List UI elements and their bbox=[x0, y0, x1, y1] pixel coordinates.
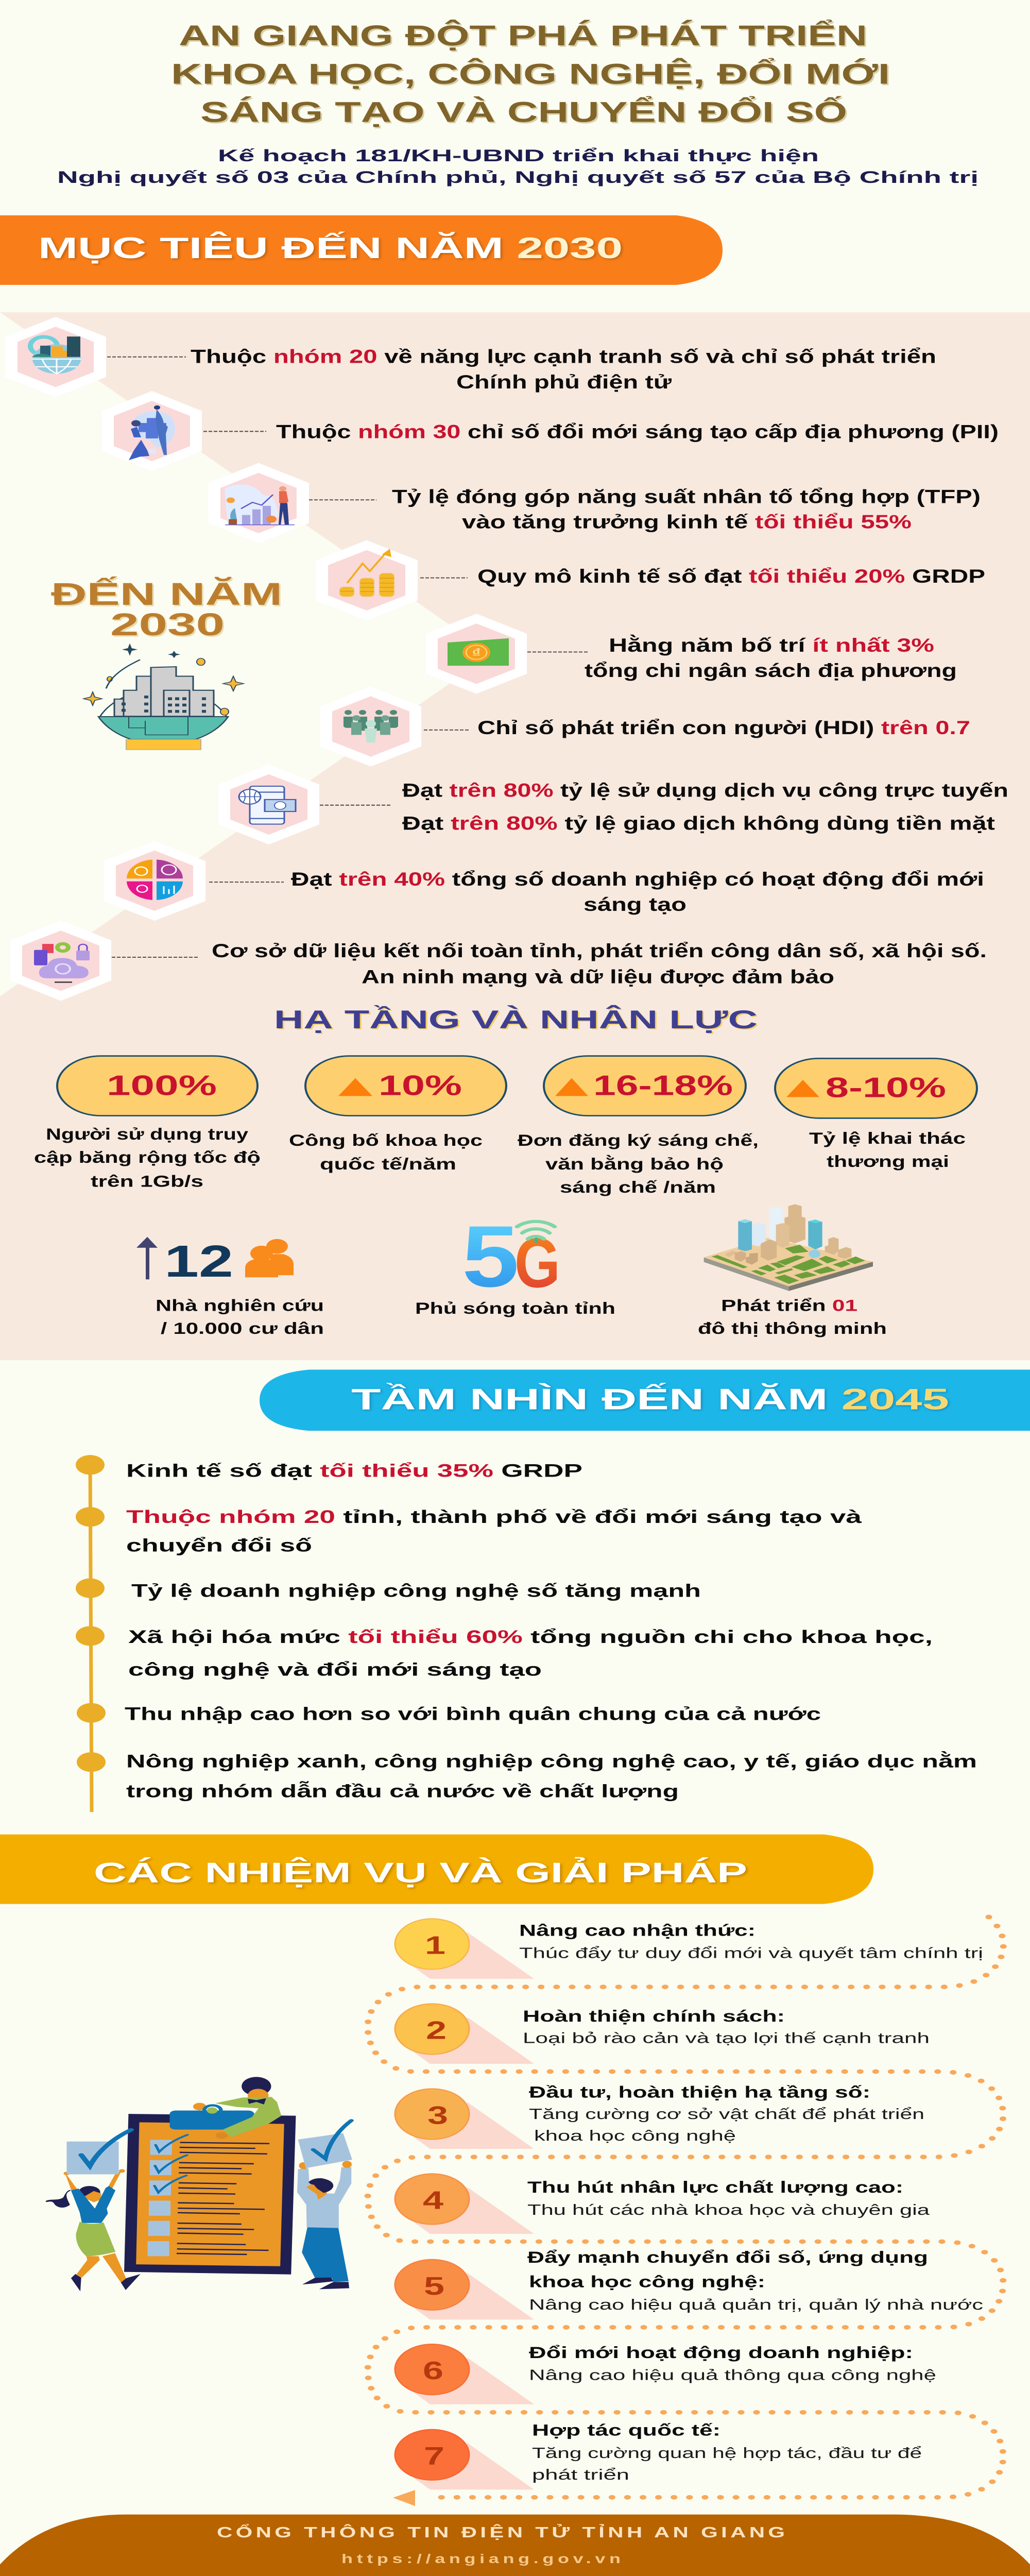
heading: by 2030: 2030 bbox=[110, 607, 225, 642]
goal 4 bbox=[316, 540, 985, 620]
stat: 8-10%: 8-10% bbox=[826, 1072, 946, 1103]
checklist rows bbox=[147, 2140, 172, 2256]
goal 7 bbox=[218, 765, 1008, 844]
text: goal 6: Chỉ số phát triển con người (HDI) trên 0.7 bbox=[477, 717, 970, 738]
number: 12 bbox=[164, 1236, 233, 1286]
text: goal 9: An ninh mạng và dữ liệu được đảm bảo bbox=[362, 966, 834, 987]
footer: https://angiang.gov.vn bbox=[341, 2551, 621, 2566]
icon: 5G: G bbox=[514, 1224, 560, 1302]
text: goal 4: Quy mô kinh tế số đạt tối thiểu 20% GRDP bbox=[477, 566, 985, 587]
text: goal 5: tổng chi ngân sách địa phương bbox=[585, 659, 957, 681]
banner: goals to 2030: MỤC TIÊU ĐẾN NĂM 2030 bbox=[38, 231, 623, 265]
connector bbox=[424, 729, 470, 731]
connector bbox=[112, 957, 198, 958]
stat: 8-10%: thương mại bbox=[827, 1153, 949, 1171]
step 6 bbox=[395, 2344, 936, 2404]
goal 9 bbox=[10, 920, 987, 1001]
text: Thu hút các nhà khoa học và chuyên gia bbox=[527, 2201, 930, 2218]
stat: 100%: cập băng rộng tốc độ bbox=[34, 1148, 261, 1166]
goal 1 bbox=[5, 317, 936, 397]
item 4: công nghệ và đổi mới sáng tạo bbox=[128, 1659, 542, 1680]
goal 6 bbox=[320, 686, 970, 767]
item 2 bbox=[126, 1507, 862, 1556]
icon: number 4 bbox=[395, 2174, 534, 2234]
item 2: chuyển đổi số bbox=[126, 1536, 312, 1556]
text: Nâng cao hiệu quả thông qua công nghệ bbox=[529, 2366, 936, 2383]
text: Nâng cao nhận thức: bbox=[519, 1922, 756, 1940]
goal 2 bbox=[102, 391, 999, 471]
sign: right check bbox=[298, 2121, 352, 2168]
icon: number 3 bbox=[395, 2089, 534, 2149]
stat: 10%: quốc tế/năm bbox=[320, 1155, 456, 1173]
banner: tasks and solutions bbox=[0, 1835, 873, 1904]
item 4: Xã hội hóa mức tối thiểu 60% tổng nguồn chi cho khoa học, bbox=[128, 1627, 933, 1647]
icon: team puzzle bbox=[102, 391, 202, 471]
text: Phủ sóng toàn tỉnh bbox=[415, 1299, 615, 1317]
icon: globe and city bbox=[5, 317, 106, 397]
vision list bbox=[125, 1461, 977, 1801]
icon: number 6 bbox=[395, 2344, 534, 2404]
icon: innovation quadrants bbox=[104, 841, 205, 921]
banner: tasks and solutions: CÁC NHIỆM VỤ VÀ GIẢI PHÁP bbox=[94, 1857, 747, 1888]
text: goal 8: sáng tạo bbox=[583, 894, 686, 915]
arrow head bbox=[393, 2490, 415, 2506]
icon: number 1 bbox=[395, 1919, 534, 1979]
stat: 100%: 100% bbox=[107, 1070, 217, 1101]
icon: banknote: ₫ bbox=[472, 647, 481, 660]
text: Thu hút nhân lực chất lượng cao: bbox=[527, 2178, 903, 2196]
text: Đổi mới hoạt động doanh nghiệp: bbox=[529, 2344, 913, 2362]
stat: 10% bbox=[289, 1056, 506, 1173]
icon: phone payment bbox=[218, 765, 319, 844]
item 1: Kinh tế số đạt tối thiểu 35% GRDP bbox=[126, 1461, 582, 1481]
illustration: checklist team bbox=[46, 2077, 352, 2291]
stat: 16-18%: văn bằng bảo hộ bbox=[545, 1155, 724, 1173]
stat: 16-18%: sáng chế /năm bbox=[560, 1178, 716, 1196]
icon: banknote bbox=[426, 614, 527, 694]
stat: 16-18%: Đơn đăng ký sáng chế, bbox=[518, 1131, 759, 1149]
text: goal 7: Đạt trên 80% tỷ lệ giao dịch không dùng tiền mặt bbox=[402, 812, 995, 834]
title: SÁNG TẠO VÀ CHUYỂN ĐỔI SỐ bbox=[200, 96, 847, 128]
item 5: Thu nhập cao hơn so với bình quân chung của cả nước bbox=[125, 1704, 821, 1724]
icon: number 6: 6 bbox=[423, 2357, 443, 2385]
heading: infrastructure and human resources: HẠ TẦNG VÀ NHÂN LỰC bbox=[274, 1005, 758, 1034]
text: Hoàn thiện chính sách: bbox=[523, 2007, 785, 2025]
text bbox=[532, 2421, 922, 2483]
text bbox=[698, 1297, 887, 1337]
item 3: Tỷ lệ doanh nghiệp công nghệ số tăng mạnh bbox=[131, 1581, 701, 1601]
connector bbox=[107, 356, 186, 358]
stat: 16-18% bbox=[518, 1056, 759, 1196]
text: goal 7 bbox=[402, 779, 1008, 834]
sign: left check bbox=[66, 2130, 131, 2174]
stat: 100%: Người sử dụng truy bbox=[46, 1125, 248, 1143]
goal 5 bbox=[426, 614, 957, 694]
item 2: Thuộc nhóm 20 tỉnh, thành phố về đổi mới sáng tạo và bbox=[126, 1507, 862, 1527]
stat: 8-10%: Tỷ lệ khai thác bbox=[809, 1129, 966, 1147]
step 2 bbox=[395, 2004, 930, 2064]
text: Tăng cường cơ sở vật chất để phát triển bbox=[529, 2106, 924, 2122]
text: Thúc đẩy tư duy đổi mới và quyết tâm chính trị bbox=[519, 1944, 983, 1961]
icon: 5G: 5 bbox=[462, 1208, 519, 1305]
text bbox=[527, 2248, 983, 2313]
text: Đầu tư, hoàn thiện hạ tầng số: bbox=[529, 2083, 870, 2101]
text: Đẩy mạnh chuyển đổi số, ứng dụng bbox=[527, 2248, 928, 2266]
text bbox=[523, 2007, 930, 2046]
connector bbox=[309, 499, 376, 501]
icon: isometric city bbox=[704, 1204, 873, 1291]
icon: people group bbox=[320, 686, 421, 767]
icon: number 5 bbox=[395, 2260, 534, 2319]
step 3 bbox=[395, 2083, 924, 2149]
text: Tăng cường quan hệ hợp tác, đầu tư để bbox=[532, 2445, 922, 2461]
icon: number 5: 5 bbox=[424, 2272, 444, 2300]
stat: 100% bbox=[34, 1056, 261, 1190]
dotted path bbox=[368, 1917, 1003, 2506]
icon: number 2: 2 bbox=[426, 2016, 447, 2045]
goal 8 bbox=[104, 841, 984, 921]
icon: TFP growth chart bbox=[208, 463, 309, 543]
clipboard bbox=[124, 2103, 296, 2275]
banner: goals to 2030 bbox=[0, 215, 723, 285]
icon: smart city globe bbox=[83, 645, 244, 750]
text: khoa học công nghệ: bbox=[529, 2273, 765, 2291]
panel: goals background bbox=[0, 312, 1030, 1360]
icon: cloud data security bbox=[10, 920, 111, 1001]
text bbox=[529, 2083, 924, 2144]
icon: number 1: 1 bbox=[425, 1931, 445, 1960]
icon: people bbox=[245, 1239, 294, 1277]
text: goal 9 bbox=[212, 940, 987, 987]
text: Phát triển 01 bbox=[721, 1297, 857, 1315]
text: Nâng cao hiệu quả quản trị, quản lý nhà nước bbox=[529, 2296, 983, 2313]
text: goal 8: Đạt trên 40% tổng số doanh nghiệp có hoạt động đổi mới bbox=[291, 868, 984, 890]
item 6: Nông nghiệp xanh, công nghiệp công nghệ cao, y tế, giáo dục nằm bbox=[126, 1751, 977, 1771]
text: goal 3 bbox=[392, 486, 981, 532]
text: goal 3: vào tăng trưởng kinh tế tối thiểu 55% bbox=[462, 511, 912, 532]
subtitle: Nghị quyết số 03 của Chính phủ, Nghị quyết số 57 của Bộ Chính trị bbox=[57, 168, 978, 187]
stat: smart city bbox=[698, 1204, 887, 1337]
item 4 bbox=[128, 1627, 933, 1680]
connector bbox=[320, 804, 391, 806]
text: goal 3: Tỷ lệ đóng góp năng suất nhân tố tổng hợp (TFP) bbox=[392, 486, 981, 507]
footer: CỔNG THÔNG TIN ĐIỆN TỬ TỈNH AN GIANG bbox=[217, 2524, 785, 2540]
timeline bbox=[76, 1455, 106, 1812]
title bbox=[171, 19, 890, 128]
item 6: trong nhóm dẫn đầu cả nước về chất lượng bbox=[126, 1781, 679, 1801]
clip bbox=[193, 2103, 206, 2110]
connector bbox=[527, 651, 588, 653]
step 7 bbox=[395, 2421, 922, 2489]
text: / 10.000 cư dân bbox=[161, 1319, 324, 1337]
heading: by 2030: ĐẾN NĂM bbox=[51, 576, 282, 612]
stat: 100%: trên 1Gb/s bbox=[91, 1172, 203, 1190]
figure: woman bbox=[46, 2169, 141, 2291]
title: AN GIANG ĐỘT PHÁ PHÁT TRIỂN bbox=[179, 19, 867, 52]
connector bbox=[209, 882, 284, 883]
text bbox=[156, 1297, 324, 1337]
subtitle bbox=[57, 146, 978, 187]
text: goal 8 bbox=[291, 868, 984, 915]
figure: man bbox=[297, 2161, 352, 2289]
icon: number 3: 3 bbox=[427, 2102, 448, 2130]
stat: 5G coverage bbox=[415, 1208, 615, 1317]
footer bbox=[0, 2515, 1030, 2576]
banner: vision to 2045: TẦM NHÌN ĐẾN NĂM 2045 bbox=[351, 1383, 949, 1416]
step 5 bbox=[395, 2248, 983, 2319]
text bbox=[527, 2178, 930, 2218]
stat: 16-18%: 16-18% bbox=[593, 1070, 733, 1101]
stat: 10%: Công bố khoa học bbox=[289, 1131, 483, 1149]
heading: by 2030 bbox=[51, 576, 282, 642]
text: goal 1: Thuộc nhóm 20 về năng lực cạnh tranh số và chỉ số phát triển bbox=[191, 346, 936, 367]
text: goal 5 bbox=[585, 634, 957, 681]
text bbox=[519, 1922, 983, 1961]
text bbox=[529, 2344, 936, 2383]
text: Nhà nghiên cứu bbox=[156, 1297, 324, 1315]
step 4 bbox=[395, 2174, 930, 2234]
item 6 bbox=[126, 1751, 977, 1801]
icon: number 7: 7 bbox=[424, 2442, 444, 2470]
text: đô thị thông minh bbox=[698, 1319, 887, 1337]
stat: 8-10% bbox=[775, 1058, 977, 1171]
text: phát triển bbox=[532, 2466, 629, 2483]
stat: 10%: 10% bbox=[379, 1070, 462, 1101]
icon: number 4: 4 bbox=[423, 2187, 443, 2215]
icon: number 2 bbox=[395, 2004, 534, 2064]
text: goal 5: Hằng năm bố trí ít nhất 3% bbox=[609, 634, 934, 656]
connector bbox=[420, 577, 468, 579]
text: goal 1 bbox=[191, 346, 936, 393]
step 1 bbox=[395, 1919, 983, 1979]
goal 3 bbox=[208, 463, 981, 543]
text: Loại bỏ rào cản và tạo lợi thế cạnh tranh bbox=[523, 2029, 930, 2046]
icon: up arrow bbox=[136, 1237, 158, 1279]
subtitle: Kế hoạch 181/KH-UBND triển khai thực hiện bbox=[218, 146, 819, 165]
icon: number 7 bbox=[395, 2430, 534, 2489]
connector bbox=[203, 431, 266, 432]
text: Hợp tác quốc tế: bbox=[532, 2421, 720, 2439]
text: goal 1: Chính phủ điện tử bbox=[456, 371, 672, 393]
icon: coins and arrow bbox=[316, 540, 418, 620]
stat: 12 researchers bbox=[136, 1236, 324, 1337]
banner: vision to 2045 bbox=[260, 1370, 1030, 1431]
text: khoa học công nghệ bbox=[534, 2127, 736, 2144]
title: KHOA HỌC, CÔNG NGHỆ, ĐỔI MỚI bbox=[171, 57, 890, 90]
figure: top person bbox=[215, 2077, 281, 2139]
